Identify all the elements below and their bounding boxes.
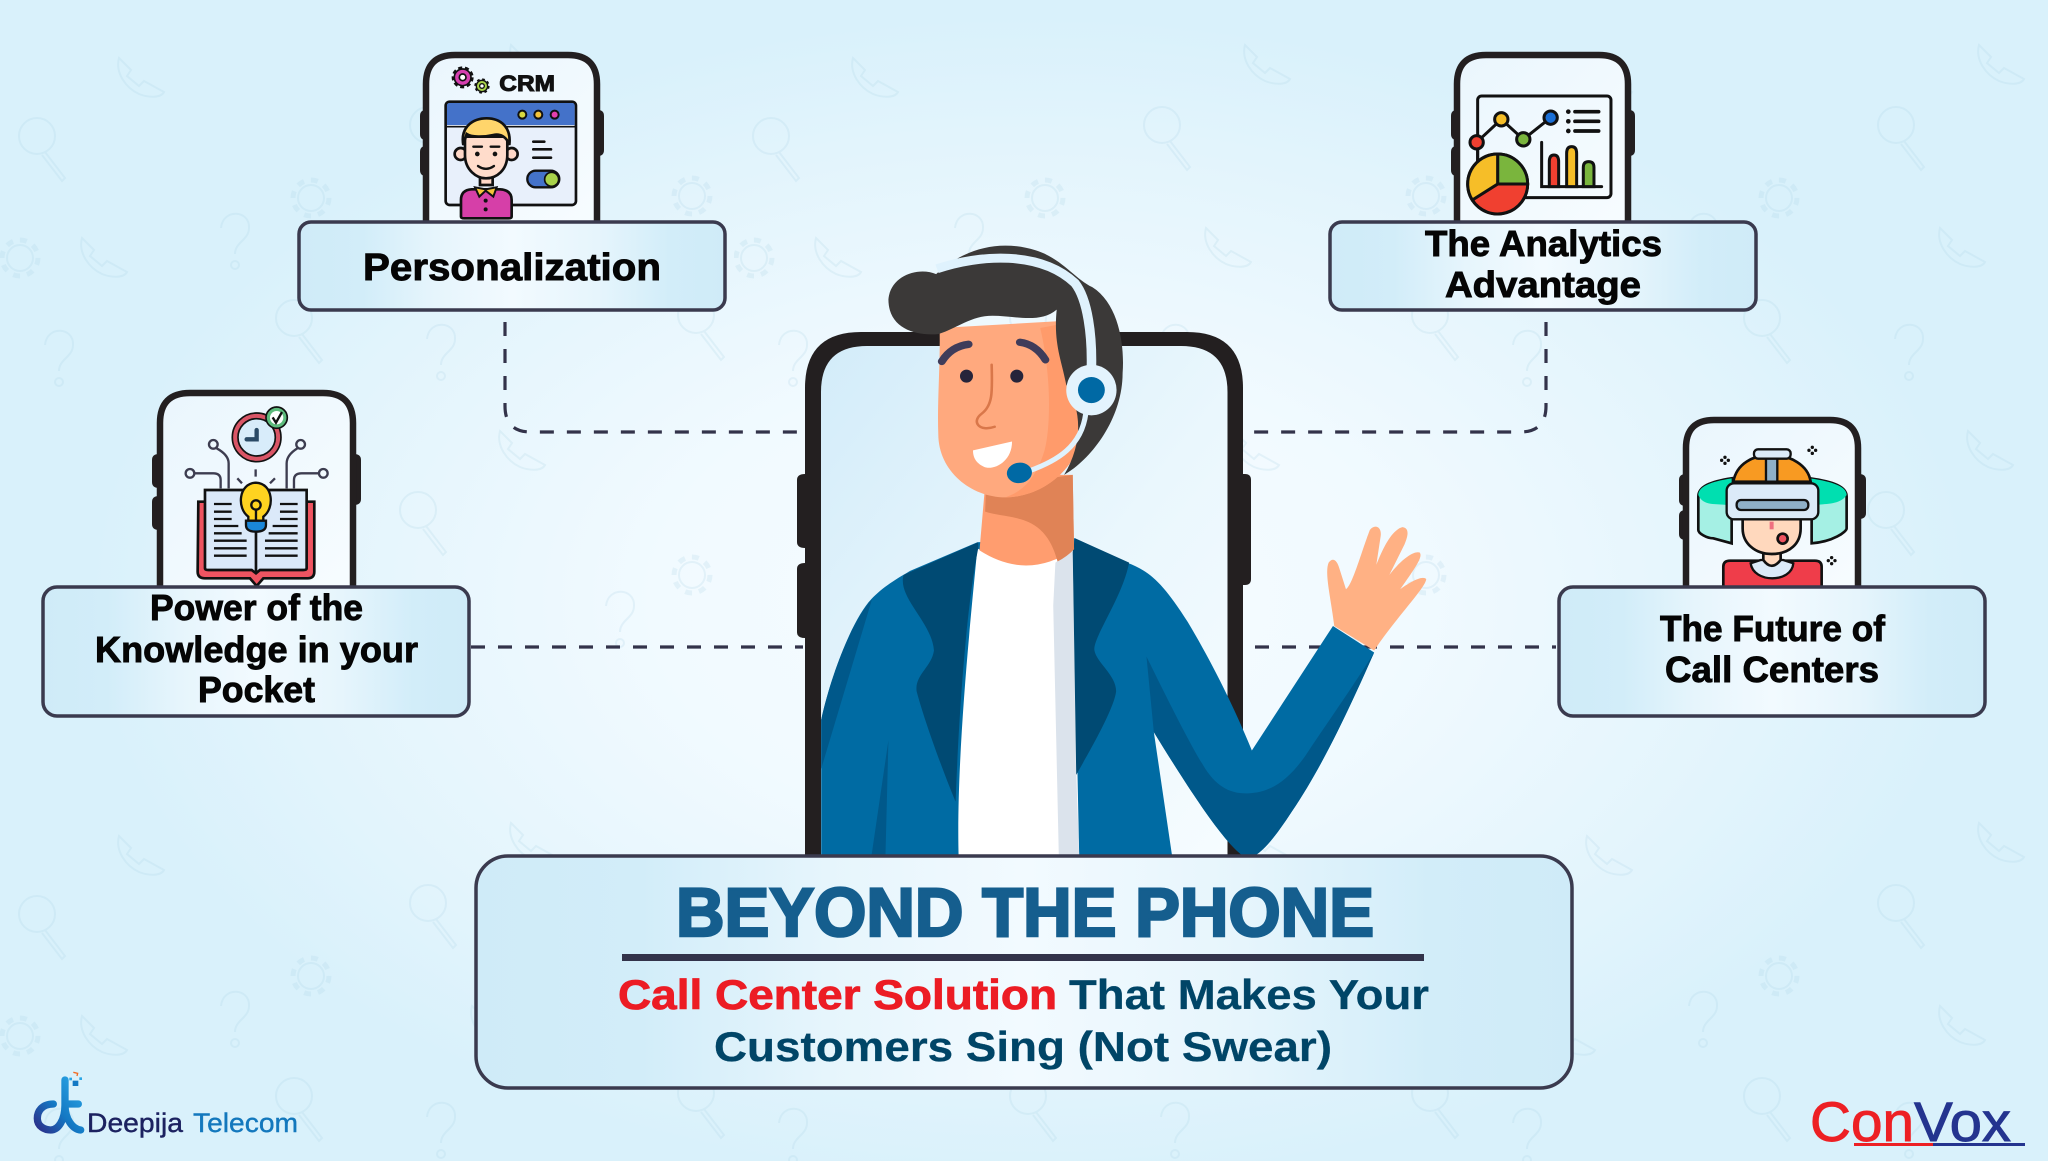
label box: The Future of: [1660, 608, 1886, 649]
book: [198, 490, 314, 586]
hair: [888, 246, 1123, 475]
subtitle: That Makes Your: [1069, 971, 1429, 1018]
headset earpiece: [1066, 365, 1117, 415]
headset band: [937, 258, 1092, 369]
legend list: [1566, 109, 1599, 133]
logo: ConVox: [1810, 1090, 2025, 1153]
smile: [973, 441, 1012, 468]
shirt: [958, 548, 1079, 859]
band top: [1698, 478, 1847, 505]
sparkles: [1720, 446, 1837, 565]
agent illustration: [821, 246, 1426, 859]
icon: CRM profile: [446, 68, 576, 218]
dashed connectors: [471, 322, 1556, 647]
logo: ConVox: Con: [1810, 1090, 1914, 1153]
label box: Knowledge in your: [95, 629, 418, 670]
phone frame: [1451, 55, 1635, 226]
label box: Personalization: [363, 247, 661, 289]
phone frame: [1679, 420, 1866, 592]
label box: [1330, 222, 1756, 310]
phone frame: [420, 55, 604, 226]
CRM label: CRM: [499, 71, 555, 96]
jacket: [821, 538, 1374, 859]
dome: [1733, 455, 1811, 482]
user avatar: [455, 118, 518, 218]
logo: ConVox: Vox: [1914, 1090, 2011, 1153]
label box: [1559, 587, 1985, 716]
face: [938, 320, 1084, 497]
divider: [622, 954, 1424, 961]
clock: [232, 407, 287, 462]
eyes: [960, 370, 1023, 383]
neck shadow: [985, 475, 1074, 561]
shirt: [1723, 561, 1822, 588]
wraparound band: [1698, 478, 1847, 543]
eyebrows: [942, 342, 1045, 361]
headset mic: [1005, 414, 1086, 485]
logo text: Telecom: [193, 1108, 298, 1138]
icon: analytics dashboard: [1468, 96, 1611, 214]
label box: [299, 222, 725, 310]
goggles: [1727, 483, 1818, 519]
icon: VR headset user: [1698, 446, 1847, 588]
dashboard frame: [1478, 96, 1611, 198]
card: Power of the Knowledge in your Pocket: [43, 393, 469, 716]
card: The Analytics Advantage: [1330, 55, 1756, 310]
logo text: Deepija: [87, 1108, 184, 1138]
browser window: [446, 102, 576, 205]
central phone: [797, 332, 1251, 860]
subtitle: Customers Sing (Not Swear): [714, 1023, 1332, 1070]
nose: [977, 365, 995, 428]
circuit lines: [186, 440, 328, 488]
gears: [453, 68, 489, 93]
face shade: [1006, 320, 1084, 497]
hand: [1327, 527, 1426, 650]
phone frame: [152, 393, 361, 590]
subtitle: [618, 971, 1429, 1070]
jacket side shadows: [821, 599, 888, 859]
logo mark: [37, 1072, 82, 1130]
pie chart: [1468, 154, 1528, 214]
label box: Pocket: [198, 669, 315, 710]
card: The Future of Call Centers: [1559, 420, 1985, 716]
neck and face: [1743, 517, 1801, 566]
logo: Deepija Telecom: [37, 1072, 298, 1138]
label box: The Analytics: [1425, 223, 1662, 264]
shirt shade: [1053, 550, 1079, 859]
collar: [1751, 560, 1793, 578]
icon: book with bulb: [186, 407, 328, 586]
label box: Advantage: [1445, 264, 1641, 305]
label box: Call Centers: [1665, 649, 1879, 690]
title panel: [476, 856, 1572, 1088]
line chart: [1470, 111, 1557, 163]
bar chart: [1542, 142, 1602, 187]
label box: Power of the: [150, 587, 363, 628]
strap: [1754, 449, 1791, 482]
light bulb: [241, 483, 271, 532]
jacket arm shadow: [1146, 652, 1374, 859]
subtitle: Call Center Solution: [618, 971, 1057, 1018]
card: Personalization: [299, 55, 725, 310]
lapels: [903, 538, 1129, 801]
logo text: [87, 1108, 298, 1138]
agent neck: [980, 475, 1074, 565]
heading: BEYOND THE PHONE: [676, 874, 1374, 951]
label box: [43, 587, 469, 716]
